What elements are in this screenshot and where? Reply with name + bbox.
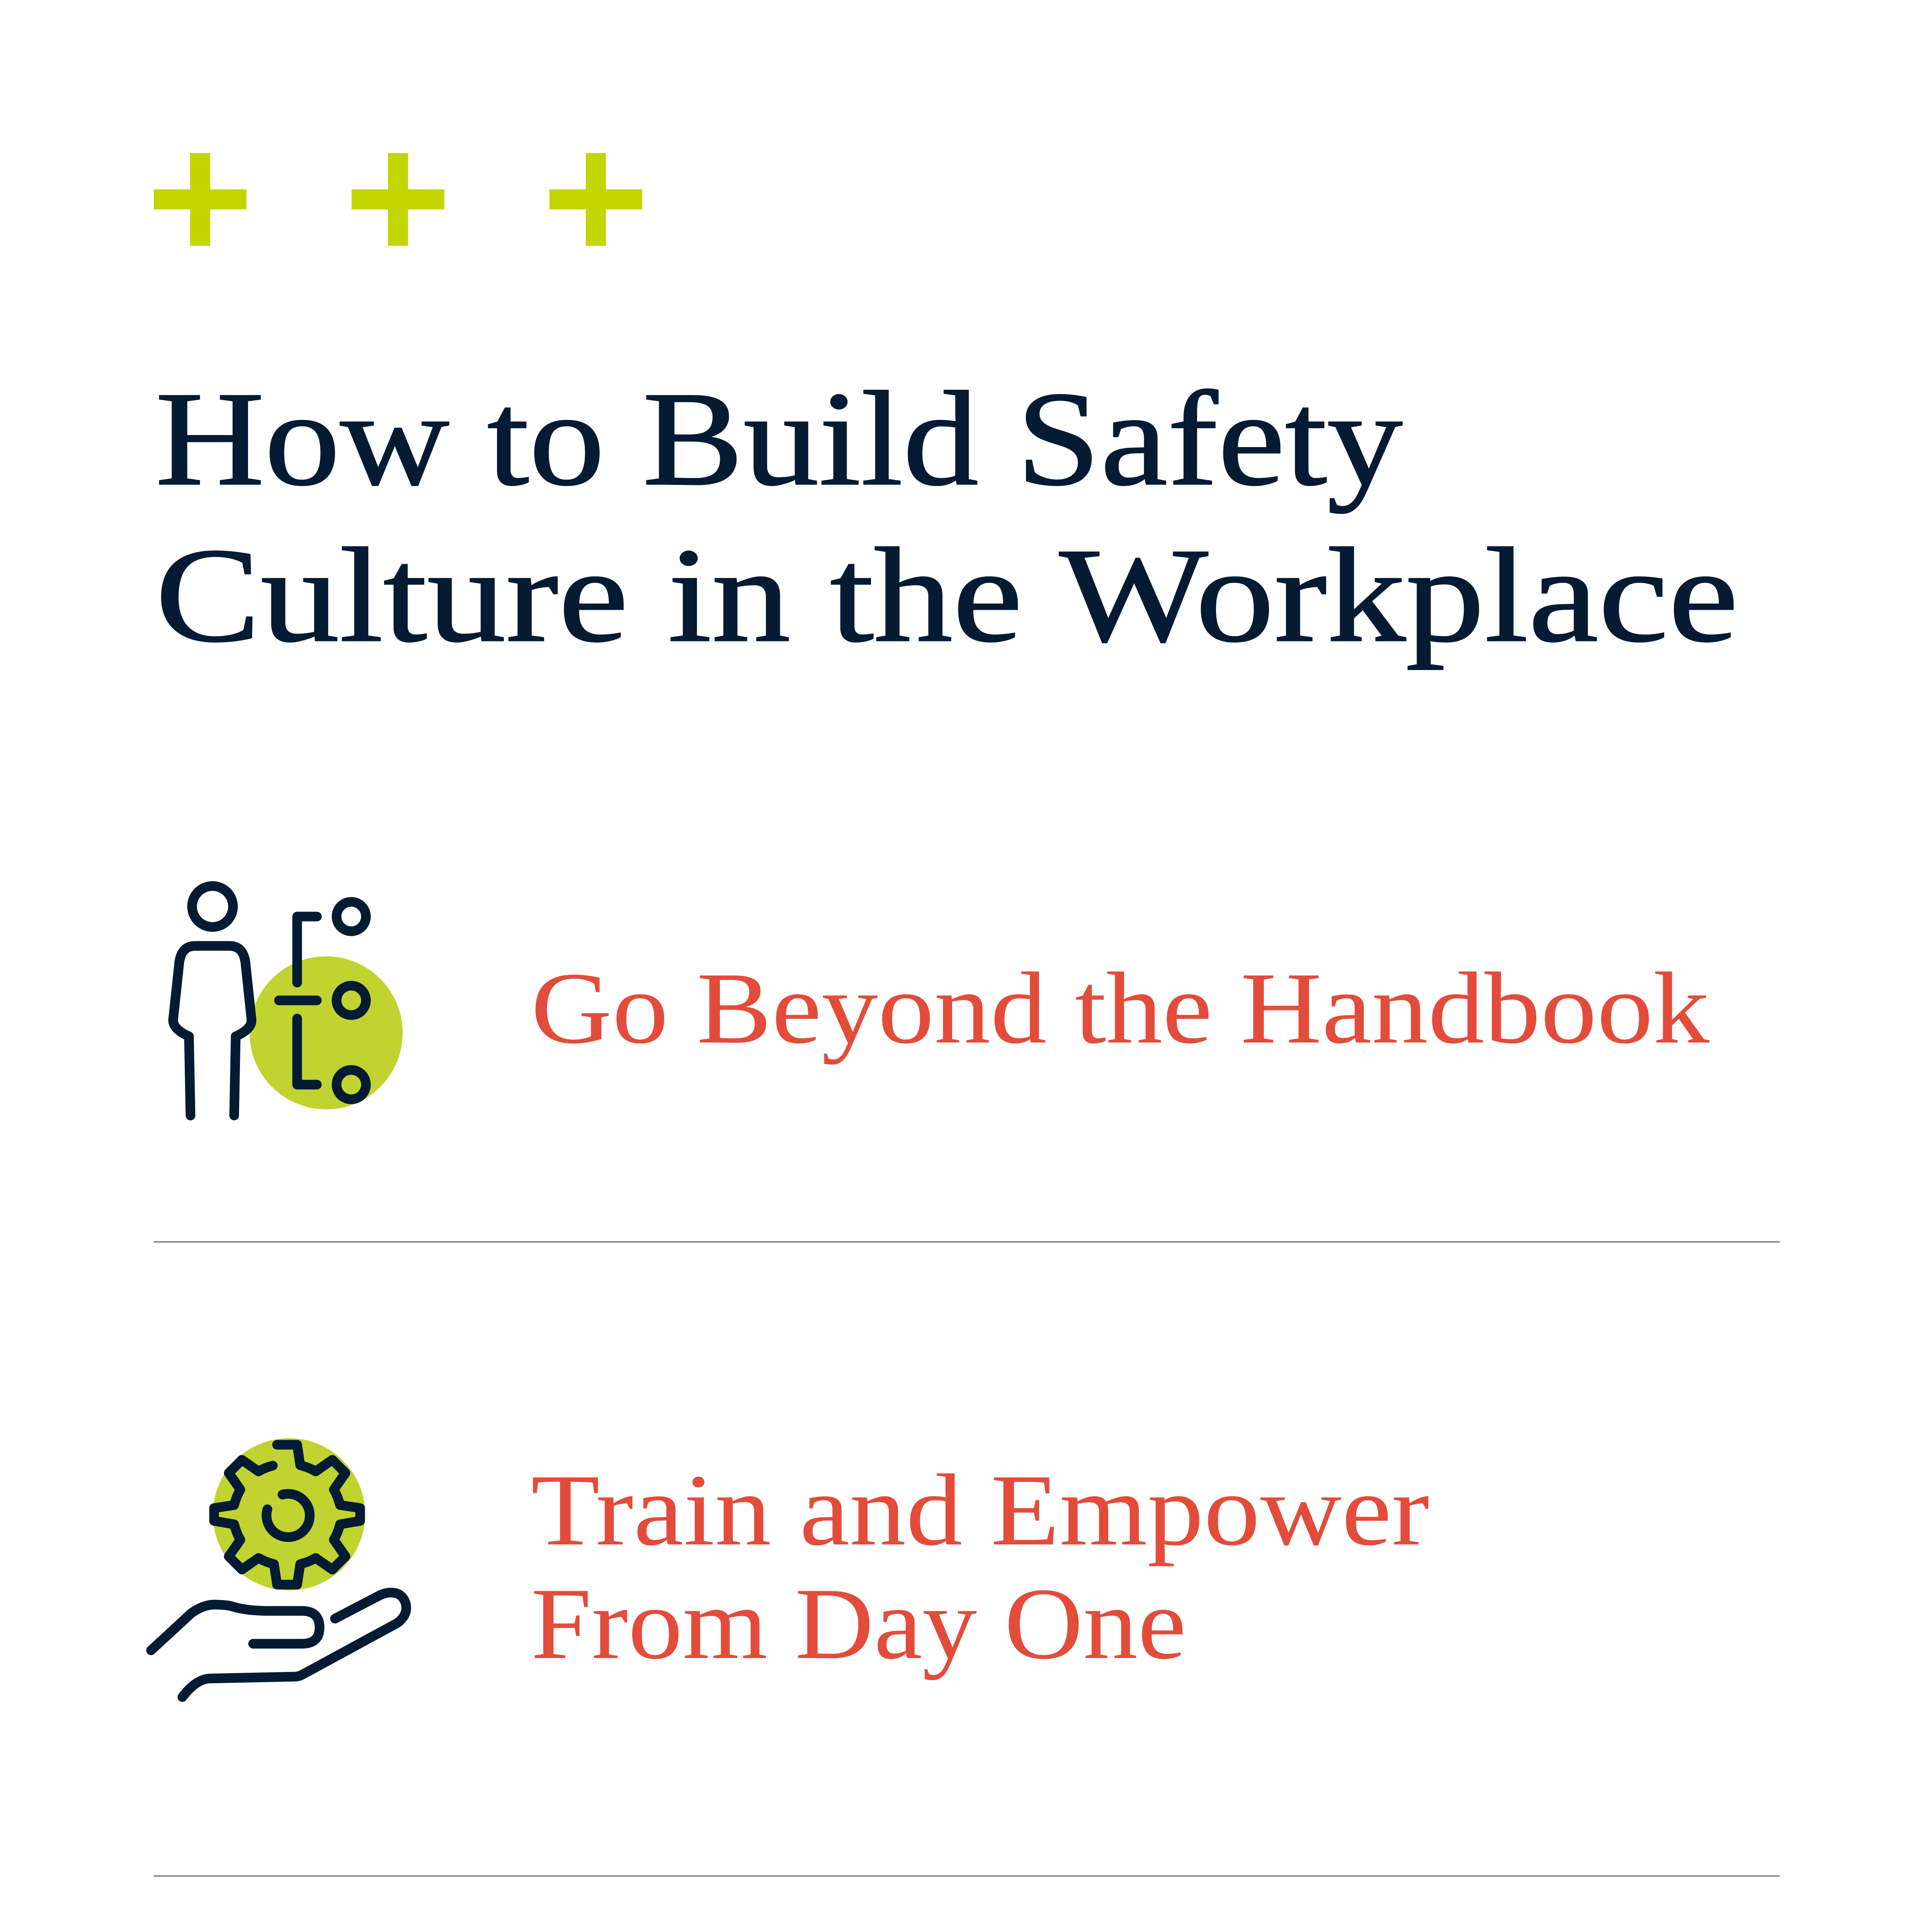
icon: hand holding gear: [151, 1438, 406, 1697]
heading: train and empower: [531, 1454, 1429, 1680]
icon: person with org chart: [173, 886, 403, 1116]
title: Culture in the Workplace: [155, 520, 1738, 670]
heading: go beyond the handbook: Go Beyond the Handbook: [531, 952, 1709, 1065]
plus signs decoration: [154, 153, 642, 246]
title: [155, 364, 1738, 670]
heading: train and empower: From Day One: [531, 1567, 1186, 1680]
heading: train and empower: Train and Empower: [531, 1454, 1429, 1567]
title: How to Build Safety: [155, 364, 1403, 514]
